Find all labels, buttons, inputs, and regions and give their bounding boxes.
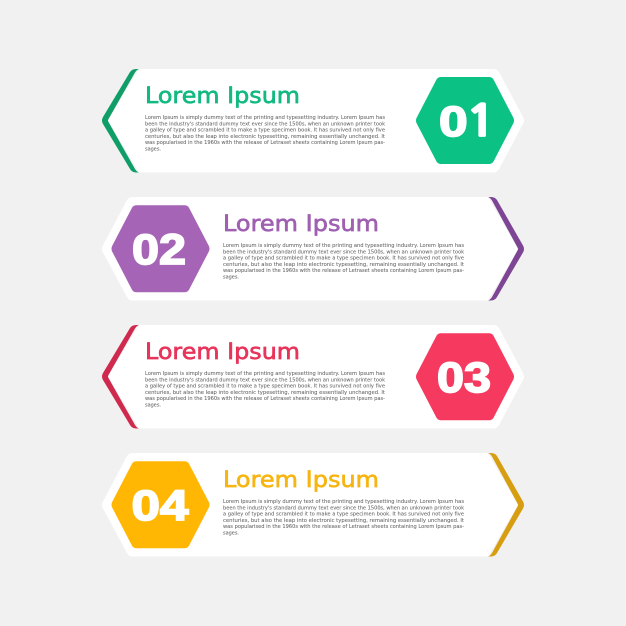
chevron accent 04 — [488, 453, 524, 556]
body text 04 — [223, 499, 465, 536]
body text 01: sages. — [145, 146, 161, 152]
body text 03: was popularised in the 1960s with the release of Letraset sheets containing Lorem Ipsum pas- — [145, 396, 385, 402]
number badge 03 — [416, 333, 514, 420]
number badge 04 — [112, 461, 210, 548]
body text 03 — [145, 371, 386, 408]
body text 04: a galley of type and scrambled it to make a type specimen book. It has survived not only five — [223, 512, 464, 518]
body text 01 — [145, 115, 386, 152]
panel: step 02 — [102, 197, 524, 300]
body text 03: been the industry's standard dummy text ever since the 1500s, when an unknown printer took — [145, 377, 386, 383]
body text 02: sages. — [223, 274, 239, 280]
body text 02: a galley of type and scrambled it to make a type specimen book. It has survived not only five — [223, 256, 464, 262]
heading 02: Lorem Ipsum — [223, 212, 379, 237]
panel: step 01 — [102, 69, 524, 172]
body text 03: centuries, but also the leap into electronic typesetting, remaining essentially unchanged. It — [145, 390, 385, 396]
chevron accent 02 — [488, 197, 524, 300]
number badge 01: 1 — [465, 101, 497, 143]
body text 02: was popularised in the 1960s with the release of Letraset sheets containing Lorem Ipsum pas- — [223, 268, 464, 274]
body text 01: was popularised in the 1960s with the release of Letraset sheets containing Lorem Ipsum pas- — [145, 140, 385, 146]
card shape 02 — [102, 197, 518, 300]
number badge 02 — [112, 205, 210, 292]
number badge 03: 03 — [437, 354, 491, 402]
body text 01: centuries, but also the leap into electronic typesetting, remaining essentially unchanged. It — [145, 134, 385, 140]
body text 04: sages. — [223, 530, 239, 536]
heading 01: Lorem Ipsum — [145, 84, 300, 109]
body text 03: Lorem Ipsum is simply dummy text of the printing and typesetting industry. Lorem Ipsum has — [145, 371, 385, 377]
number badge 04: 04 — [132, 482, 189, 530]
number badge 02: 02 — [132, 226, 186, 274]
number badge 01: 0 — [439, 98, 468, 146]
number badge 01 — [416, 77, 514, 164]
body text 02: centuries, but also the leap into electronic typesetting, remaining essentially unchanged. It — [223, 262, 464, 268]
heading 04: Lorem Ipsum — [223, 468, 379, 493]
body text 01: been the industry's standard dummy text ever since the 1500s, when an unknown printer took — [145, 121, 386, 127]
body text 04: centuries, but also the leap into electronic typesetting, remaining essentially unchanged. It — [223, 518, 464, 524]
body text 02: been the industry's standard dummy text ever since the 1500s, when an unknown printer took — [223, 249, 465, 255]
body text 04: Lorem Ipsum is simply dummy text of the printing and typesetting industry. Lorem Ipsum has — [223, 499, 464, 505]
heading 03: Lorem Ipsum — [145, 340, 300, 365]
card shape 03 — [108, 325, 524, 428]
body text 03: sages. — [145, 402, 161, 408]
body text 02 — [223, 243, 465, 280]
body text 01: Lorem Ipsum is simply dummy text of the printing and typesetting industry. Lorem Ipsum has — [145, 115, 385, 121]
body text 03: a galley of type and scrambled it to make a type specimen book. It has survived not only five — [145, 384, 385, 390]
chevron accent 01 — [102, 69, 139, 172]
chevron accent 03 — [102, 325, 139, 428]
body text 04: been the industry's standard dummy text ever since the 1500s, when an unknown printer took — [223, 505, 465, 511]
card shape 04 — [102, 453, 518, 556]
body text 04: was popularised in the 1960s with the release of Letraset sheets containing Lorem Ipsum pas- — [223, 524, 464, 530]
body text 01: a galley of type and scrambled it to make a type specimen book. It has survived not only five — [145, 128, 385, 134]
card shape 01 — [108, 69, 524, 172]
body text 02: Lorem Ipsum is simply dummy text of the printing and typesetting industry. Lorem Ipsum has — [223, 243, 464, 249]
panel: step 03 — [102, 325, 524, 428]
panel: step 04 — [102, 453, 524, 556]
